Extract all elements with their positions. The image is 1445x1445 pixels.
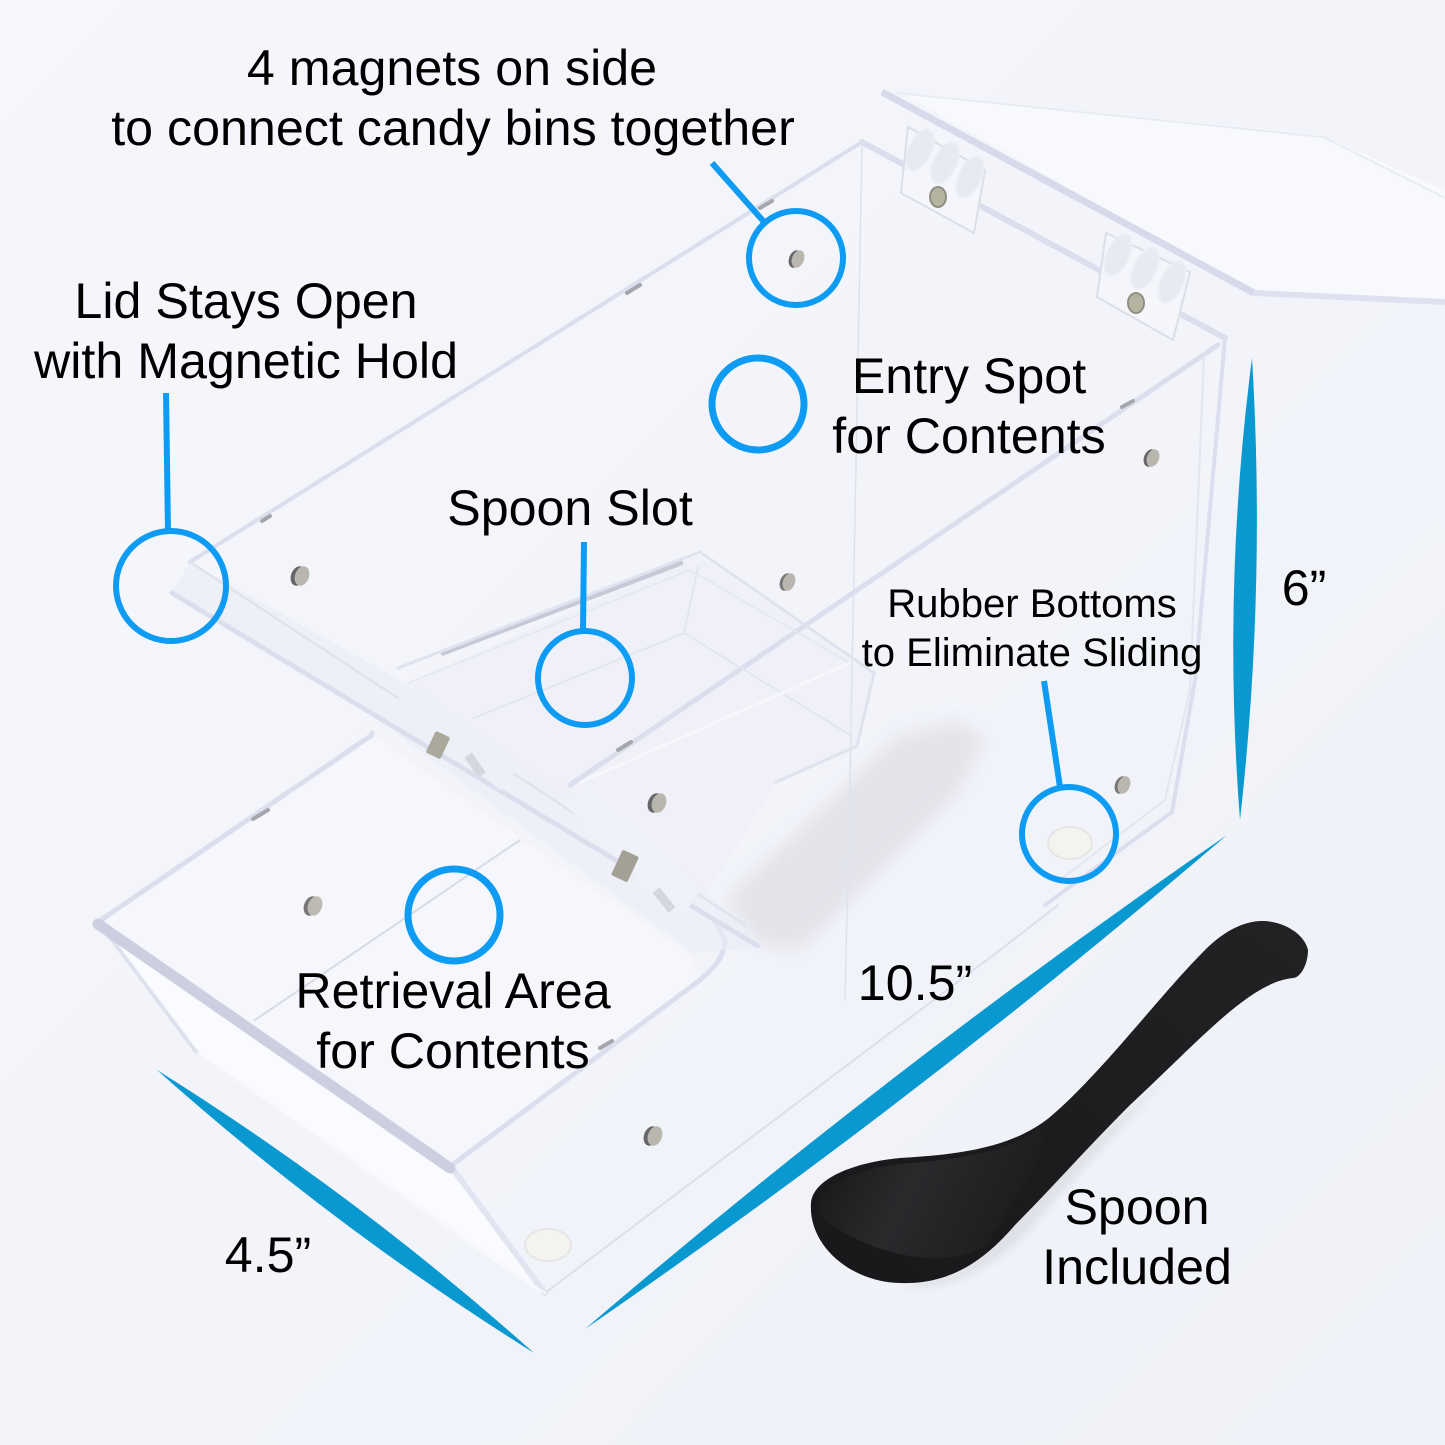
spoon	[811, 921, 1308, 1288]
rubber feet	[525, 827, 1092, 1261]
callout: magnets on side	[111, 40, 843, 305]
spoon soft shadow	[900, 1075, 1170, 1288]
callout: retrieval area: Retrieval Area	[295, 963, 611, 1019]
spoon slot tray	[398, 552, 874, 782]
callout: lid stays open: Lid Stays Open	[74, 273, 418, 329]
callout: rubber bottoms	[862, 582, 1202, 881]
light surfaces and shadow	[98, 92, 1445, 1293]
callout: entry spot	[712, 348, 1106, 464]
callout: magnets on side: 4 magnets on side	[247, 40, 657, 96]
callout: rubber bottoms: Rubber Bottoms	[887, 582, 1177, 626]
hinges, top	[901, 125, 1191, 340]
callout: spoon slot: Spoon Slot	[447, 480, 693, 536]
spoon label	[1042, 1179, 1232, 1295]
callout: entry spot: Entry Spot	[852, 348, 1086, 404]
dimension: length 10.5 inches: 10.5”	[858, 955, 972, 1011]
spoon label: Spoon	[1064, 1179, 1210, 1235]
callout: lid stays open: with Magnetic Hold	[33, 333, 458, 389]
magnets	[288, 248, 1162, 1148]
open lid	[882, 92, 1445, 302]
callout: retrieval area	[295, 869, 611, 1079]
callout: lid stays open	[33, 273, 458, 641]
callout: entry spot: for Contents	[832, 408, 1106, 464]
hinges, front	[395, 690, 700, 920]
box edges	[98, 142, 1225, 1293]
dimension: height 6 inches	[1233, 358, 1326, 820]
thick front edge	[98, 924, 450, 1168]
callout: retrieval area: for Contents	[316, 1023, 590, 1079]
dimension: width 4.5 inches: 4.5”	[225, 1227, 311, 1283]
tick marks on edges	[253, 201, 1133, 1048]
callout: magnets on side: to connect candy bins together	[111, 100, 795, 156]
dimension: length 10.5 inches	[585, 835, 1227, 1329]
lid front strip	[172, 562, 760, 953]
dimension: width 4.5 inches	[157, 1070, 534, 1353]
acrylic candy bin	[98, 92, 1445, 1293]
dimension: height 6 inches: 6”	[1282, 560, 1326, 616]
callout: spoon slot	[447, 480, 693, 725]
callout: rubber bottoms: to Eliminate Sliding	[862, 631, 1202, 675]
spoon bowl	[817, 1128, 1042, 1258]
spoon body	[811, 921, 1308, 1283]
spoon label: Included	[1042, 1239, 1232, 1295]
